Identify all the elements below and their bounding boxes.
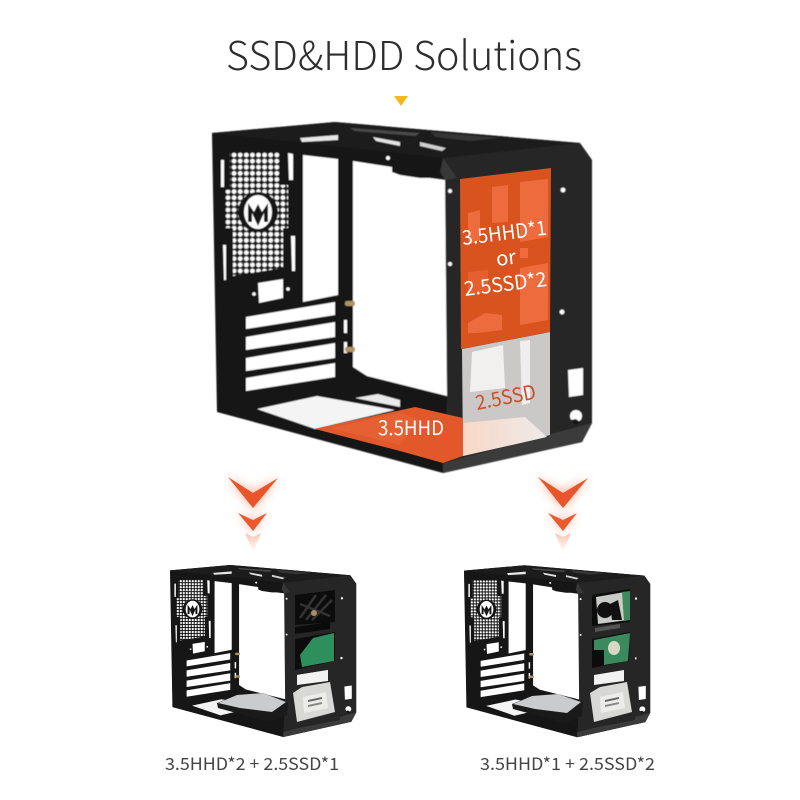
- silver drive in lower bay: [288, 670, 340, 730]
- caption right: 3.5HHD*1 + 2.5SSD*2: [480, 750, 655, 775]
- green drive board: [300, 633, 334, 667]
- floor drive: [512, 694, 583, 723]
- main case illustration: [212, 122, 592, 473]
- caption left: 3.5HHD*2 + 2.5SSD*1: [165, 750, 339, 775]
- left small case: two HDD plus one SSD: [170, 565, 356, 737]
- case frame: [212, 122, 592, 473]
- right small case: one HDD plus two SSD: [464, 565, 650, 737]
- bay capacity label: 2.5SSD*2: [462, 263, 548, 302]
- icon: yellow down triangle: [394, 96, 408, 106]
- left arrow: chevrons: [228, 477, 278, 552]
- orange floor bay: [315, 407, 463, 463]
- bay capacity label: or: [494, 241, 518, 272]
- 3.5HHD label: 3.5HHD: [378, 412, 444, 441]
- upper drive: [583, 588, 635, 680]
- bay capacity label: 3.5HHD*1: [460, 212, 548, 251]
- right arrow: chevrons: [538, 477, 588, 552]
- fan and drive back: [288, 588, 340, 680]
- silver drive in lower bay: [583, 670, 635, 730]
- orange highlighted bay: [460, 168, 551, 349]
- bay capacity label: [460, 212, 548, 302]
- grey 2.5 SSD bay: [462, 332, 550, 456]
- title: SSD&HDD Solutions: [226, 24, 582, 82]
- case frame small: [464, 565, 650, 737]
- case frame small: [170, 565, 356, 737]
- 2.5SSD label: 2.5SSD: [473, 376, 538, 416]
- floor drive: [217, 693, 288, 722]
- opening above bottom drive: [297, 670, 328, 683]
- lower green drive: [592, 632, 630, 668]
